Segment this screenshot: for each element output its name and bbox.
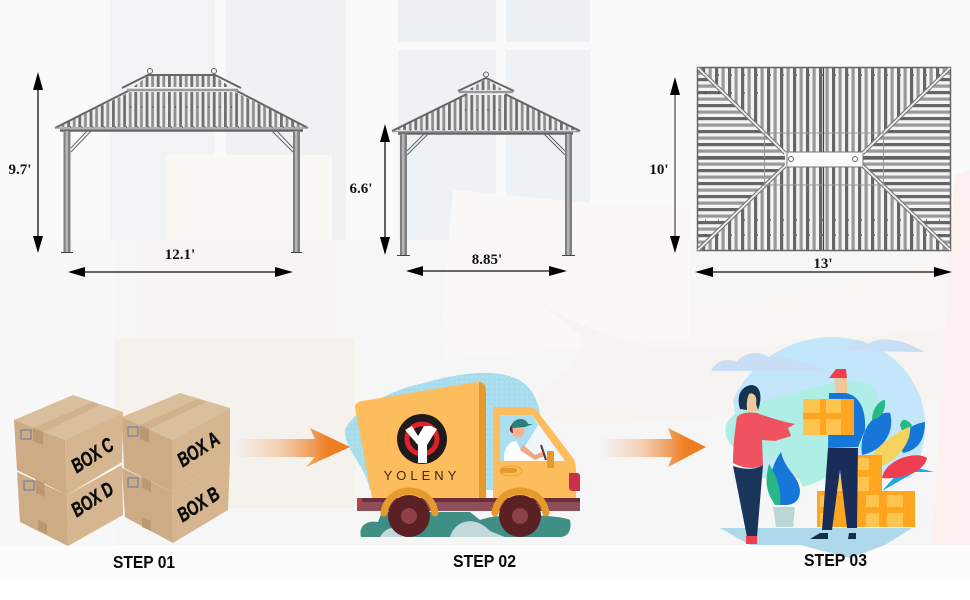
- cargo box: [355, 382, 486, 498]
- delivery man: [803, 369, 865, 539]
- logo: [397, 414, 447, 464]
- bushes: [360, 512, 571, 537]
- dimension 12.1 ft width: 12.1': [165, 247, 195, 263]
- mint shape: [726, 381, 878, 487]
- box A: [122, 393, 230, 492]
- delivery scene: [711, 337, 934, 558]
- dimension 12.1 ft width: [68, 247, 293, 277]
- blue background blob: [345, 373, 540, 490]
- box C: [14, 395, 123, 495]
- leaves: [862, 413, 891, 455]
- dimension 8.85 ft width: 8.85': [472, 252, 502, 268]
- dimension 6.6 ft height: [350, 124, 390, 255]
- dimension 10 ft height: [649, 77, 680, 253]
- box D: [17, 465, 123, 546]
- step 02 label: STEP 02: [453, 551, 516, 571]
- woman: [733, 385, 795, 544]
- dimension 9.7 ft height: [9, 72, 43, 253]
- box A: BOX A: [173, 428, 224, 472]
- brand name: YOLENY: [384, 468, 460, 483]
- blue circle: [733, 337, 925, 478]
- carried parcel: [803, 399, 854, 435]
- clouds: [711, 353, 830, 371]
- box B: [122, 458, 230, 543]
- delivery truck: [345, 373, 580, 537]
- step 01 label: STEP 01: [113, 552, 175, 572]
- plant: [771, 452, 800, 505]
- dimension 13 ft width: [695, 256, 952, 277]
- arrow: step 1 to step 2: [237, 428, 350, 467]
- cab: [493, 407, 576, 498]
- step 03 label: STEP 03: [804, 550, 867, 570]
- cab window: [500, 415, 565, 461]
- ground: [720, 528, 912, 558]
- box D: BOX D: [67, 478, 118, 522]
- stacked parcels: [817, 491, 915, 527]
- fenders: [384, 491, 435, 513]
- gazebo front view 12.1 ft: [55, 68, 308, 252]
- gazebo roof top view: [698, 68, 950, 250]
- dimension 8.85 ft width: [406, 252, 567, 276]
- wheels: [388, 495, 430, 537]
- dimension 9.7 ft height: 9.7': [9, 162, 31, 178]
- driver: [504, 419, 546, 461]
- dimension 13 ft width: 13': [813, 256, 833, 272]
- arrow: step 2 to step 3: [600, 428, 706, 467]
- box B: BOX B: [173, 483, 224, 527]
- box C: BOX C: [67, 434, 118, 478]
- gazebo side view 8.85 ft: [392, 72, 580, 256]
- dimension 10 ft height: 10': [649, 162, 669, 178]
- stacked boxes: [14, 393, 230, 546]
- chassis: [357, 498, 580, 511]
- dimension 6.6 ft height: 6.6': [350, 181, 372, 197]
